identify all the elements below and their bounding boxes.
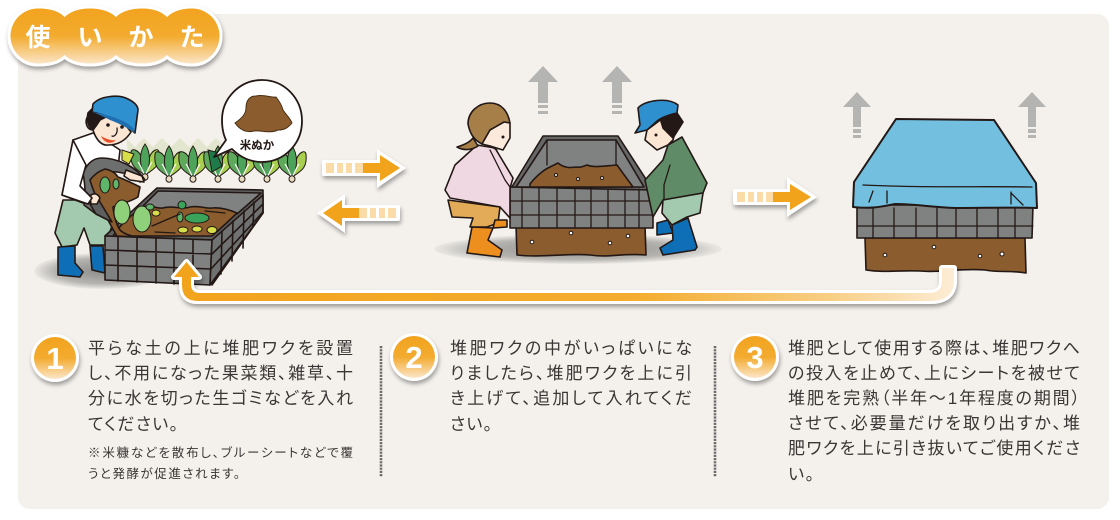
title badge: 使: [25, 24, 51, 52]
title badge: [10, 8, 220, 64]
ground shadow: [34, 253, 170, 289]
step 3: [731, 333, 1080, 484]
number badge 3: [731, 333, 779, 381]
note: ※米糠などを散布し、ブルーシートなどで覆: [88, 445, 353, 460]
text block 3: させて、必要量だけを取り出すか、堆: [788, 414, 1080, 433]
text block 2: [450, 339, 692, 434]
title badge: か: [128, 24, 154, 52]
text block 3: 堆肥として使用する際は、堆肥ワクへ: [788, 338, 1080, 358]
compost box front: [100, 177, 263, 285]
text block 2: りましたら、堆肥ワクを上に引: [450, 364, 692, 383]
step 1: [31, 334, 353, 481]
note: [88, 445, 353, 481]
grey up arrows: scene 3: [843, 92, 1046, 138]
text block 3: の投入を止めて、上にシートを被せて: [788, 364, 1080, 383]
step 2: [390, 333, 692, 434]
return arrow: [174, 262, 954, 301]
number badge 1: 1: [46, 341, 64, 376]
text block 1: 分に水を切った生ゴミなどを入れ: [88, 388, 353, 408]
farmer legs and boots: [55, 200, 112, 277]
text block 1: 平らな土の上に堆肥ワクを設置: [88, 339, 353, 358]
compost box back: [105, 188, 263, 285]
number badge 3: 3: [746, 340, 764, 375]
farmer body: [62, 133, 120, 203]
illustration: scene 3: [853, 119, 1037, 273]
text block 1: てください。: [88, 415, 178, 434]
row of plants: [122, 138, 306, 182]
illustration: scene 1: [34, 80, 306, 289]
farmer head and cap: [86, 96, 138, 145]
compost under box: [516, 226, 646, 256]
woman: [445, 103, 513, 257]
text block 3: [788, 338, 1080, 484]
title badge: い: [77, 24, 103, 52]
text block 3: い。: [788, 465, 814, 484]
blue sheet: [853, 119, 1037, 208]
crate: [857, 205, 1033, 238]
speech bubble: rice bran: [214, 80, 302, 162]
grey up arrows: scene 2: [528, 66, 632, 114]
number badge 2: [390, 333, 438, 381]
compost: [865, 238, 1026, 273]
farmer arm: [62, 140, 92, 204]
text block 3: 肥ワクを上に引き抜いてご使用くださ: [788, 438, 1080, 458]
scraps: [114, 200, 130, 224]
text block 2: 堆肥ワクの中がいっぱいにな: [450, 339, 692, 358]
speech bubble: rice bran: 米ぬか: [240, 138, 275, 152]
illustration: scene 2: [434, 100, 722, 264]
arrow: step 1 to 2: [322, 149, 406, 188]
text block 2: さい。: [450, 415, 492, 434]
note: うと発酵が促進されます。: [88, 466, 240, 481]
bucket of scraps: [83, 158, 145, 237]
man: [635, 100, 707, 255]
ground shadow: [434, 234, 722, 264]
number badge 1: [31, 334, 79, 382]
text block 2: き上げて、追加して入れてくだ: [450, 389, 692, 408]
arrow: step 2 to 3: [733, 177, 817, 217]
compost box: [510, 136, 653, 228]
arrow: step 2 back to 1: [317, 194, 400, 233]
text block 3: 堆肥を完熟（半年～1年程度の期間）: [788, 389, 1080, 408]
text block 1: [88, 339, 353, 434]
title badge: た: [179, 24, 205, 52]
text block 1: し、不用になった果菜類、雑草、十: [88, 364, 353, 383]
number badge 2: 2: [405, 340, 423, 375]
